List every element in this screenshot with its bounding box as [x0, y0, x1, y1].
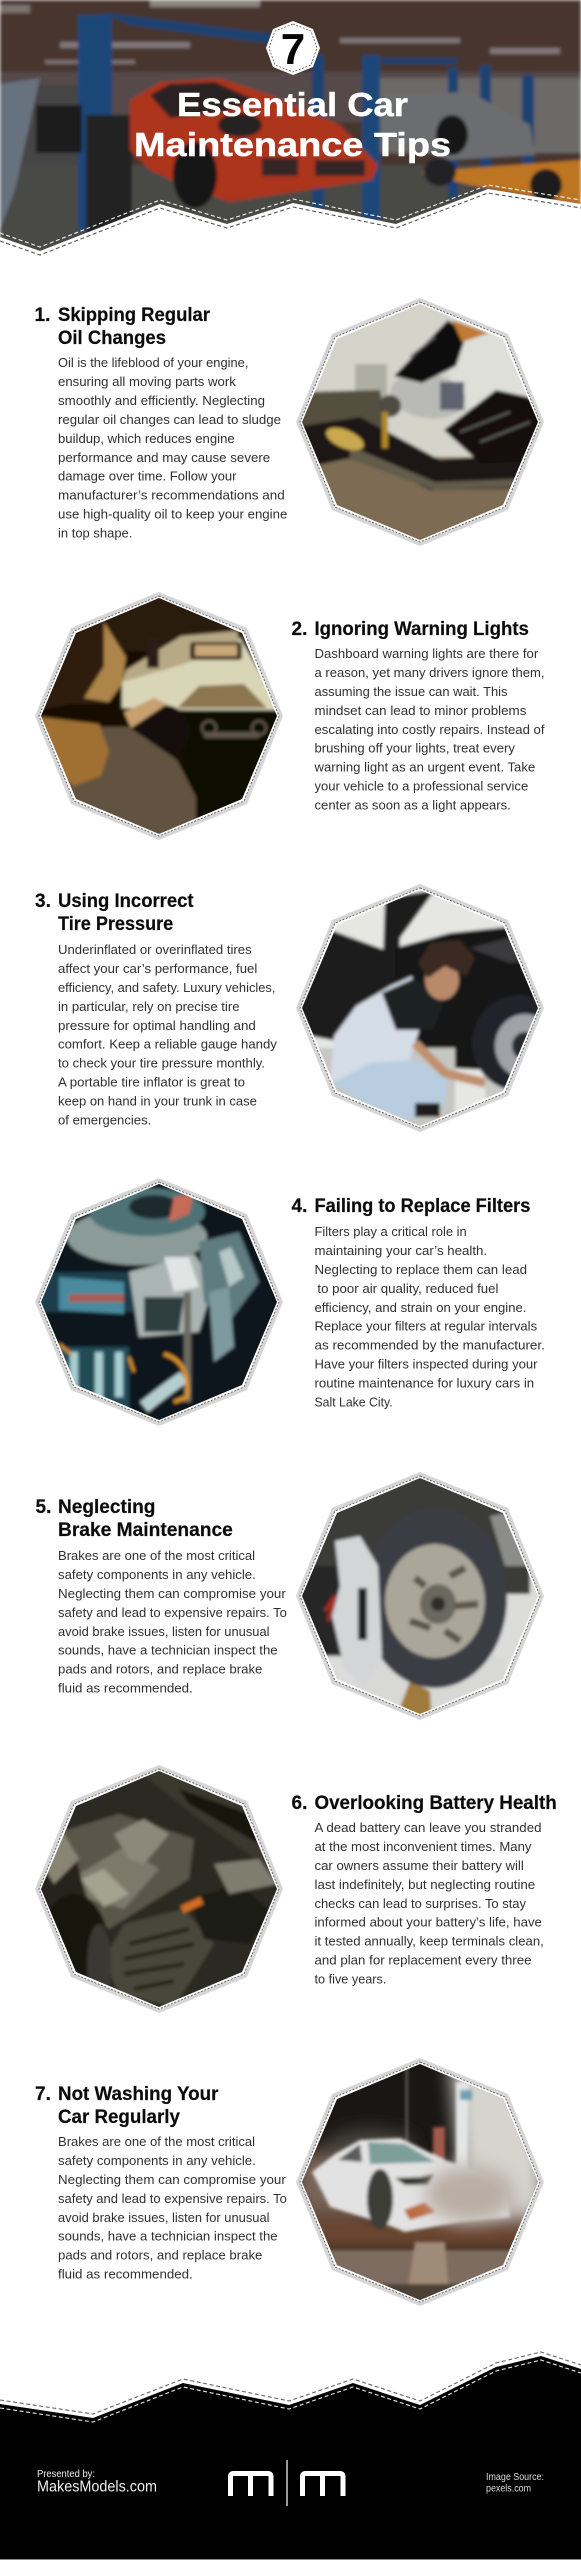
heading: tip 3: Tire Pressure — [58, 914, 173, 935]
text block: tip 2: escalating into costly repairs. Instead of — [314, 722, 545, 737]
text block: tip 7: safety and lead to expensive repairs. To — [58, 2191, 287, 2206]
text block: tip 6: checks can lead to surprises. To stay — [314, 1896, 526, 1911]
text block: tip 6: at the most inconvenient times. Many — [314, 1839, 532, 1854]
text block: tip 2: your vehicle to a professional service — [314, 778, 528, 794]
badge: number 7: 7 — [281, 25, 305, 74]
photo: pouring engine oil — [295, 297, 545, 547]
text block: tip 6: informed about your battery’s life, have — [314, 1914, 542, 1930]
title: Maintenance Tips — [134, 126, 451, 163]
heading: tip 7: 7. — [35, 2084, 51, 2105]
text block: tip 1: buildup, which reduces engine — [58, 431, 235, 446]
text block: tip 2: a reason, yet many drivers ignore them, — [314, 665, 544, 680]
text block: tip 3: A portable tire inflator is great to — [58, 1074, 245, 1090]
photo: white car in car wash — [295, 2057, 545, 2307]
text block: tip 4: Neglecting to replace them can lead — [314, 1262, 527, 1277]
panel: tip 6 battery — [34, 1764, 557, 2014]
text block: tip 7: safety components in any vehicle. — [58, 2153, 256, 2168]
text block: tip 5: safety and lead to expensive repairs. To — [58, 1605, 287, 1620]
text block: tip 3: affect your car’s performance, fuel — [58, 961, 257, 976]
text block: tip 7: pads and rotors, and replace brake — [58, 2248, 262, 2262]
text block: tip 3: Underinflated or overinflated tires — [58, 942, 252, 957]
title: Essential Car — [177, 86, 408, 123]
text block: tip 6: it tested annually, keep terminals clean, — [314, 1934, 544, 1948]
text block: tip 4 — [314, 1224, 545, 1410]
text block: tip 2: warning light as an urgent event. Take — [313, 760, 535, 774]
footer: image source: Image Source: — [486, 2471, 544, 2483]
text block: tip 6: last indefinitely, but neglecting routine — [314, 1877, 535, 1892]
photo: brake disc and caliper — [295, 1471, 545, 1721]
text block: tip 1: performance and may cause severe — [58, 450, 270, 465]
panel: tip 3 tire pressure — [35, 883, 568, 1133]
heading: tip 7: Car Regularly — [58, 2107, 180, 2128]
logo: m | m — [230, 2460, 343, 2506]
text block: tip 7 — [58, 2134, 287, 2282]
text block: tip 1 — [58, 355, 287, 540]
text block: tip 6: to five years. — [314, 1972, 386, 1986]
heading: tip 5 — [36, 1497, 233, 1541]
heading: tip 5: 5. — [36, 1497, 51, 1518]
text block: tip 6: A dead battery can leave you stranded — [314, 1820, 542, 1835]
text block: tip 7: Neglecting them can compromise your — [58, 2172, 286, 2187]
badge: number 7 — [266, 21, 320, 75]
text block: tip 3: efficiency, and safety. Luxury vehicles, — [58, 980, 275, 995]
text block: tip 5 — [58, 1548, 287, 1696]
panel: tip 1 oil changes — [34, 297, 545, 547]
text block: tip 1: Oil is the lifeblood of your engine, — [58, 355, 248, 370]
header torn edge stitching — [0, 185, 581, 255]
text block: tip 2: mindset can lead to minor problems — [314, 703, 527, 718]
heading: tip 2: 2. — [292, 619, 307, 640]
text block: tip 3 — [58, 942, 277, 1128]
text block: tip 7: sounds, have a technician inspect the — [58, 2228, 278, 2244]
heading: tip 1 — [34, 305, 211, 349]
heading: tip 1: Skipping Regular — [58, 305, 211, 326]
panel: tip 7 washing — [35, 2057, 545, 2307]
text block: tip 1: manufacturer’s recommendations and — [58, 488, 285, 502]
text block: tip 3: pressure for optimal handling and — [58, 1018, 256, 1033]
title — [134, 86, 451, 163]
heading: tip 5: Neglecting — [58, 1497, 155, 1518]
heading: tip 4: Failing to Replace Filters — [314, 1196, 530, 1217]
text block: tip 2 — [313, 646, 545, 812]
footer: presented by: MakesModels.com — [37, 2478, 157, 2496]
text block: tip 4: Replace your filters at regular intervals — [314, 1318, 538, 1334]
heading: tip 6: 6. — [292, 1793, 307, 1814]
text block: tip 2: brushing off your lights, treat every — [314, 740, 515, 756]
heading: tip 2: Ignoring Warning Lights — [314, 619, 529, 640]
text block: tip 2: center as soon as a light appears. — [314, 798, 511, 812]
text block: tip 5: fluid as recommended. — [58, 1680, 193, 1696]
panel: tip 4 filters — [34, 1177, 545, 1427]
footer: image source: pexels.com — [486, 2482, 531, 2494]
text block: tip 5: Brakes are one of the most critical — [58, 1548, 255, 1563]
text block: tip 3: of emergencies. — [58, 1112, 151, 1128]
footer: image source — [486, 2471, 544, 2494]
text block: tip 1: use high-quality oil to keep your engine — [58, 506, 287, 522]
panel: tip 2 warning lights — [34, 591, 545, 841]
text block: tip 7: avoid brake issues, listen for unusual — [58, 2210, 270, 2225]
text block: tip 4: Have your filters inspected during your — [314, 1356, 538, 1372]
text block: tip 5: sounds, have a technician inspect the — [58, 1642, 278, 1658]
text block: tip 4: efficiency, and strain on your engine. — [314, 1300, 526, 1315]
heading: tip 5: Brake Maintenance — [58, 1520, 233, 1541]
header: garage photo banner — [0, 0, 581, 260]
text block: tip 4: maintaining your car’s health. — [314, 1243, 487, 1258]
text block: tip 3: in particular, rely on precise tire — [58, 999, 240, 1014]
text block: tip 6: car owners assume their battery will — [314, 1858, 524, 1873]
text block: tip 1: in top shape. — [58, 526, 132, 540]
text block: tip 4: to poor air quality, reduced fuel — [317, 1281, 499, 1296]
heading: tip 6: Overlooking Battery Health — [314, 1793, 557, 1814]
text block: tip 5: pads and rotors, and replace brake — [58, 1662, 262, 1676]
heading: tip 7 — [35, 2084, 219, 2128]
text block: tip 5: safety components in any vehicle. — [58, 1567, 256, 1582]
photo: man checking tire — [295, 883, 568, 1133]
text block: tip 4: Filters play a critical role in — [314, 1224, 467, 1239]
text block: tip 7: Brakes are one of the most critical — [58, 2134, 255, 2149]
text block: tip 1: regular oil changes can lead to sludge — [58, 412, 281, 427]
footer: presented by — [37, 2469, 157, 2496]
footer: presented by: Presented by: — [37, 2469, 95, 2480]
text block: tip 1: smoothly and efficiently. Neglecting — [58, 393, 265, 408]
text block: tip 5: avoid brake issues, listen for unusual — [58, 1624, 270, 1639]
photo: engine bay and battery — [34, 1764, 284, 2014]
text block: tip 2: assuming the issue can wait. This — [314, 684, 508, 699]
text block: tip 4: routine maintenance for luxury cars in — [314, 1376, 534, 1390]
text block: tip 4: Salt Lake City. — [314, 1394, 393, 1410]
heading: tip 4: 4. — [292, 1196, 307, 1217]
text block: tip 2: Dashboard warning lights are there for — [314, 646, 539, 661]
photo: driver at the wheel — [34, 591, 284, 841]
text block: tip 7: fluid as recommended. — [58, 2266, 193, 2282]
heading: tip 7: Not Washing Your — [58, 2084, 219, 2105]
footer: black band — [0, 2352, 581, 2560]
heading: tip 3 — [35, 891, 194, 935]
text block: tip 4: as recommended by the manufacturer. — [314, 1338, 545, 1352]
heading: tip 3: 3. — [35, 891, 51, 912]
text block: tip 3: comfort. Keep a reliable gauge handy — [58, 1036, 277, 1052]
text block: tip 6: and plan for replacement every three — [314, 1952, 532, 1968]
text block: tip 3: keep on hand in your trunk in case — [58, 1094, 257, 1108]
photo: chrome engine — [34, 1177, 284, 1427]
panel: tip 5 brakes — [36, 1471, 545, 1721]
heading: tip 3: Using Incorrect — [58, 891, 194, 912]
text block: tip 1: ensuring all moving parts work — [58, 374, 236, 389]
text block: tip 1: damage over time. Follow your — [58, 468, 237, 484]
text block: tip 3: to check your tire pressure monthly. — [58, 1056, 265, 1070]
heading: tip 1: Oil Changes — [58, 328, 166, 349]
text block: tip 5: Neglecting them can compromise your — [58, 1586, 286, 1601]
heading: tip 1: 1. — [34, 305, 50, 326]
text block: tip 6 — [314, 1820, 544, 1986]
